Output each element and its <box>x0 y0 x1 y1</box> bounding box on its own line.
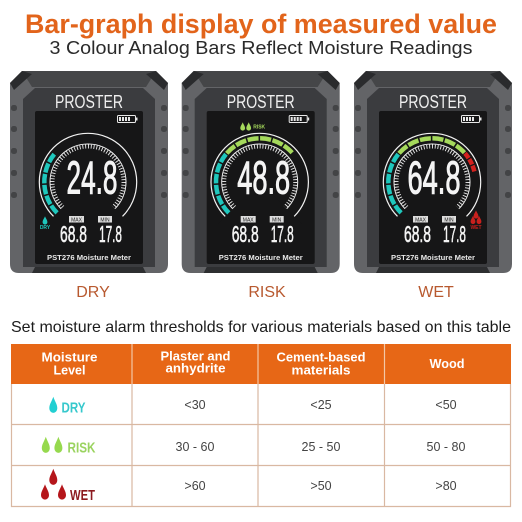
reading: 24.8 <box>66 152 118 204</box>
header: cement <box>276 350 366 378</box>
reading: 64.8 <box>408 152 460 204</box>
icon: risk drops and label: RISK <box>68 440 96 457</box>
min label: MIN <box>272 218 282 224</box>
min value: 17.8 <box>271 221 294 247</box>
row: dry: <50 <box>435 398 457 412</box>
icon: risk drops: RISK <box>253 124 266 130</box>
label: RISK: RISK <box>248 284 286 301</box>
icon: wet drops and label: WET <box>70 487 95 504</box>
icon: dry drop: DRY <box>40 225 51 231</box>
icon: wet drops: WET <box>470 225 482 231</box>
moisture bar: dry <box>26 120 150 244</box>
model label: PST276 Moisture Meter <box>391 253 475 262</box>
row: dry: <25 <box>310 398 332 412</box>
max label: MAX <box>71 218 83 224</box>
icon: wet drops and label <box>41 469 95 504</box>
icon: dry drop and label: DRY <box>62 400 86 417</box>
row: risk <box>42 437 466 457</box>
row: risk: 25 - 50 <box>302 440 341 454</box>
row: wet: >50 <box>310 479 332 493</box>
min label: MIN <box>444 218 454 224</box>
icon: dry drop <box>40 216 51 231</box>
header: moisture level: Level <box>54 363 86 378</box>
icon: dry drop and label <box>49 397 86 417</box>
min value: 17.8 <box>443 221 466 247</box>
moisture bars: dry, risk and wet <box>370 120 494 244</box>
label: DRY: DRY <box>76 284 110 301</box>
row: risk: 50 - 80 <box>427 440 466 454</box>
threshold table <box>11 344 511 506</box>
row: wet <box>41 469 457 504</box>
header: plaster: anhydrite <box>166 361 226 376</box>
model label: PST276 Moisture Meter <box>47 253 131 262</box>
icon: risk drops <box>240 122 266 131</box>
brand name: PROSTER <box>227 91 295 112</box>
brand name: PROSTER <box>55 91 123 112</box>
icon: wet drops <box>470 210 482 231</box>
header: moisture level <box>42 350 98 378</box>
header: plaster: Plaster and <box>160 349 231 364</box>
device: DRY meter <box>10 71 168 273</box>
header: moisture level: Moisture <box>42 350 98 365</box>
row: wet: >80 <box>435 479 457 493</box>
table caption: Set moisture alarm thresholds for various materials based on this table <box>11 319 511 336</box>
icon: risk drops and label <box>42 437 96 457</box>
min label: MIN <box>100 218 110 224</box>
table header <box>11 344 511 384</box>
brand name: PROSTER <box>399 91 467 112</box>
max value: 68.8 <box>232 221 259 247</box>
row: wet: >60 <box>184 479 206 493</box>
subtitle: 3 Colour Analog Bars Reflect Moisture Readings <box>50 37 472 58</box>
moisture bars: dry and risk <box>198 120 322 244</box>
max value: 68.8 <box>60 221 87 247</box>
row: dry <box>49 397 457 417</box>
header: cement: Cement-based <box>276 350 366 365</box>
header: plaster <box>160 349 231 376</box>
label: WET: WET <box>418 284 454 301</box>
row: risk: 30 - 60 <box>176 440 215 454</box>
header: wood: Wood <box>430 356 465 371</box>
min value: 17.8 <box>99 221 122 247</box>
model label: PST276 Moisture Meter <box>219 253 303 262</box>
max label: MAX <box>243 218 254 224</box>
row: dry: <30 <box>184 398 206 412</box>
reading: 48.8 <box>237 152 290 204</box>
max value: 68.8 <box>404 221 431 247</box>
title: Bar-graph display of measured value <box>25 9 497 39</box>
max label: MAX <box>415 218 427 224</box>
device: RISK meter <box>182 71 340 273</box>
header: cement: materials <box>292 363 350 378</box>
device: WET meter <box>354 71 512 273</box>
